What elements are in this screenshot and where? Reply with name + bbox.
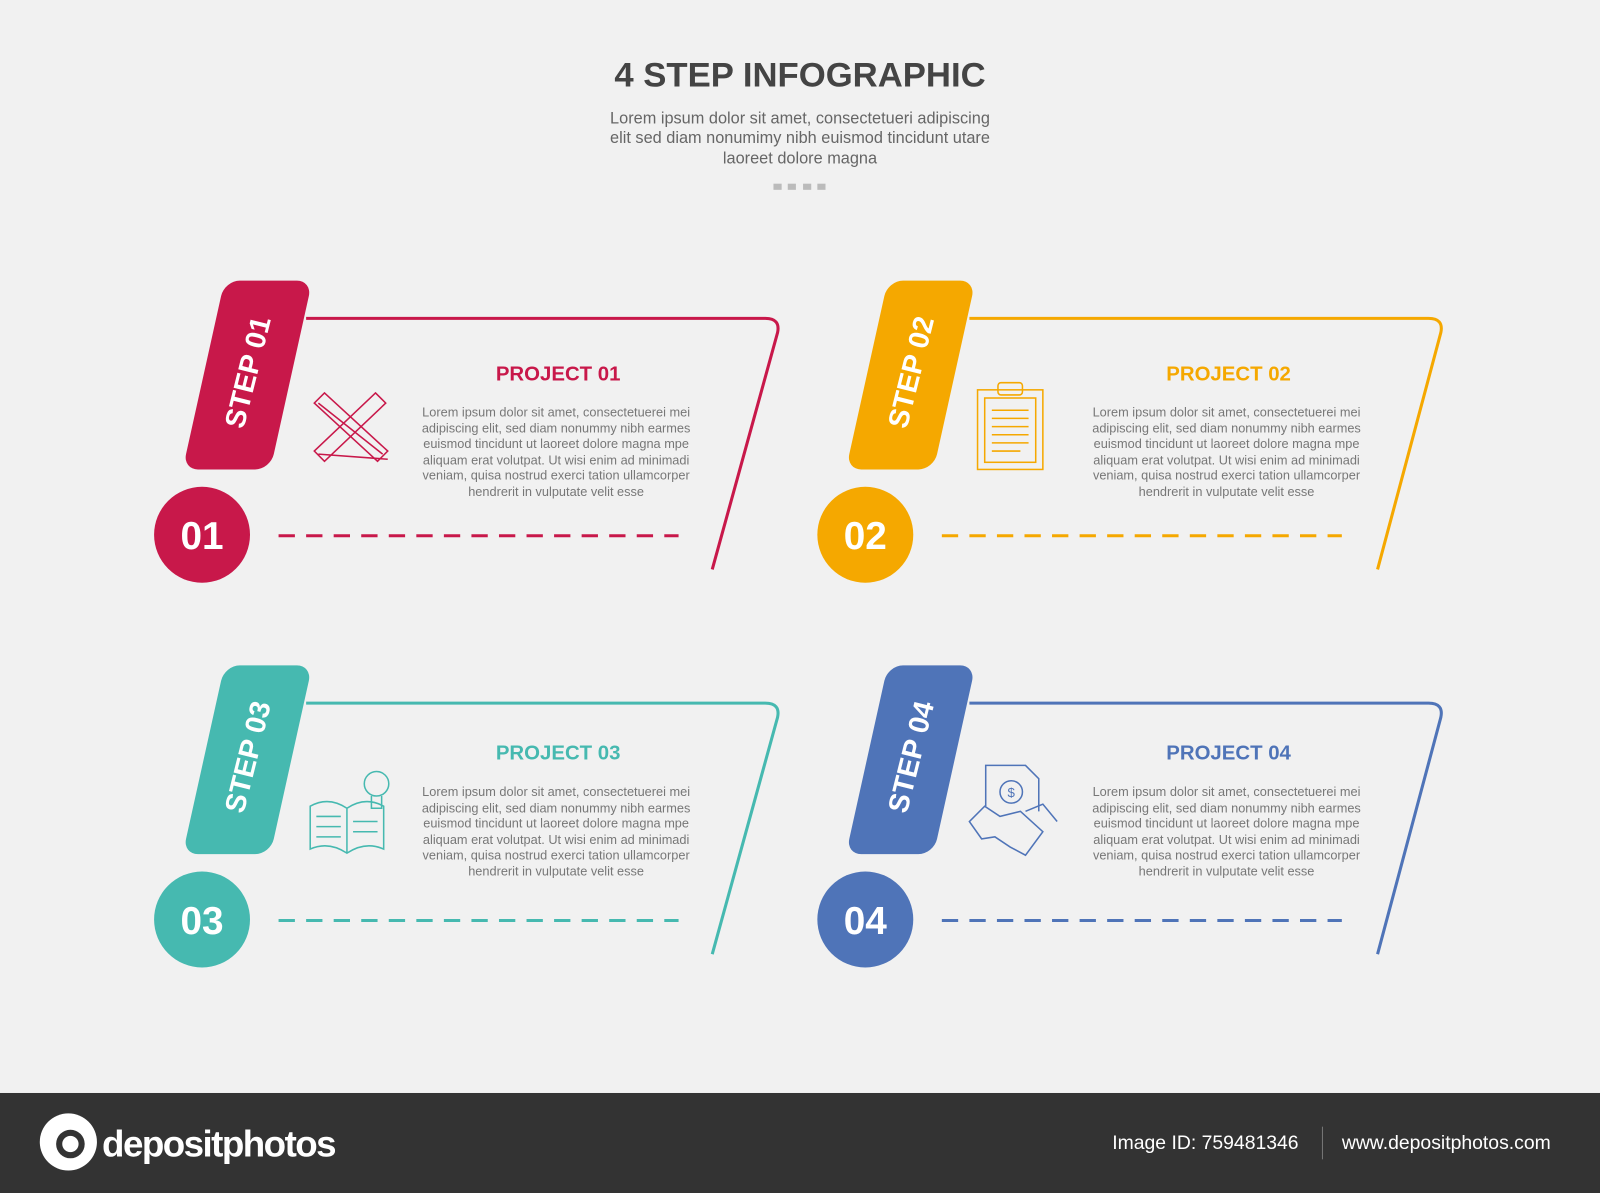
panel: step 04: adipiscing elit, sed diam nonummy nibh earmes: [1092, 800, 1361, 815]
panel: step 03: veniam, quisa nostrud exerci tation ullamcorper: [423, 847, 690, 862]
panel: step 04: STEP 04: [882, 698, 941, 816]
panel: step 04: veniam, quisa nostrud exerci tation ullamcorper: [1093, 847, 1361, 862]
panel: step 02: veniam, quisa nostrud exerci tation ullamcorper: [1093, 468, 1361, 483]
footer: depositphotos: [102, 1123, 335, 1164]
panel: step 02: 02: [844, 515, 887, 558]
panel: step 03: STEP 03: [219, 698, 278, 816]
panel: step 02: Lorem ipsum dolor sit amet, consectetuerei mei: [1093, 404, 1360, 419]
panel: step 04: PROJECT 04: [1166, 742, 1292, 764]
panel: step 01: PROJECT 01: [496, 364, 620, 386]
title: 4 STEP INFOGRAPHIC: [614, 57, 986, 95]
panel: step 04: hendrerit in vulputate velit esse: [1139, 864, 1314, 879]
panel: step 03: adipiscing elit, sed diam nonummy nibh earmes: [422, 800, 690, 815]
panel: step 01: veniam, quisa nostrud exerci tation ullamcorper: [423, 468, 690, 483]
panel: step 04: 04: [844, 900, 887, 943]
footer: [0, 1093, 1600, 1193]
panel: step 01: aliquam erat volutpat. Ut wisi enim ad minimadi: [423, 452, 689, 467]
panel: step 01: 01: [180, 515, 224, 558]
dots: [773, 184, 826, 190]
panel: step 02: aliquam erat volutpat. Ut wisi enim ad minimadi: [1093, 452, 1360, 467]
panel: step 04: aliquam erat volutpat. Ut wisi enim ad minimadi: [1093, 832, 1360, 847]
panel: step 02: hendrerit in vulputate velit esse: [1139, 484, 1314, 499]
panel: step 02: adipiscing elit, sed diam nonummy nibh earmes: [1092, 421, 1361, 436]
panel: step 01: euismod tincidunt ut laoreet dolore magna mpe: [423, 436, 689, 451]
panel: step 01: Lorem ipsum dolor sit amet, consectetuerei mei: [422, 404, 690, 419]
panel: step 01: hendrerit in vulputate velit esse: [468, 484, 644, 499]
panel: step 02: [817, 281, 1441, 583]
panel: step 01: adipiscing elit, sed diam nonummy nibh earmes: [422, 421, 690, 436]
panel: step 02: PROJECT 02: [1166, 364, 1291, 386]
subtitle: elit sed diam nonumimy nibh euismod tincidunt utare: [610, 129, 990, 147]
panel: step 04: [817, 665, 1441, 967]
subtitle: Lorem ipsum dolor sit amet, consectetueri adipiscing: [610, 109, 990, 127]
panel: step 03: 03: [180, 900, 224, 943]
panel: step 01: STEP 01: [219, 313, 278, 431]
panel: step 03: aliquam erat volutpat. Ut wisi enim ad minimadi: [423, 832, 689, 847]
subtitle: laoreet dolore magna: [723, 149, 878, 167]
panel: step 04: $: [1008, 785, 1016, 800]
subtitle: [610, 109, 990, 167]
panel: step 02: STEP 02: [882, 313, 941, 431]
panel: step 01: [154, 281, 778, 583]
panel: step 04: Lorem ipsum dolor sit amet, consectetuerei mei: [1093, 784, 1360, 799]
panel: step 03: PROJECT 03: [496, 742, 620, 764]
panel: step 03: euismod tincidunt ut laoreet dolore magna mpe: [423, 816, 689, 831]
footer: Image ID: 759481346: [1112, 1132, 1299, 1154]
footer: www.depositphotos.com: [1341, 1132, 1551, 1154]
panel: step 03: Lorem ipsum dolor sit amet, consectetuerei mei: [422, 784, 690, 799]
panel: step 02: euismod tincidunt ut laoreet dolore magna mpe: [1094, 436, 1359, 451]
panel: step 03: hendrerit in vulputate velit esse: [468, 864, 644, 879]
panel: step 03: [154, 665, 778, 967]
panel: step 04: euismod tincidunt ut laoreet dolore magna mpe: [1094, 816, 1359, 831]
